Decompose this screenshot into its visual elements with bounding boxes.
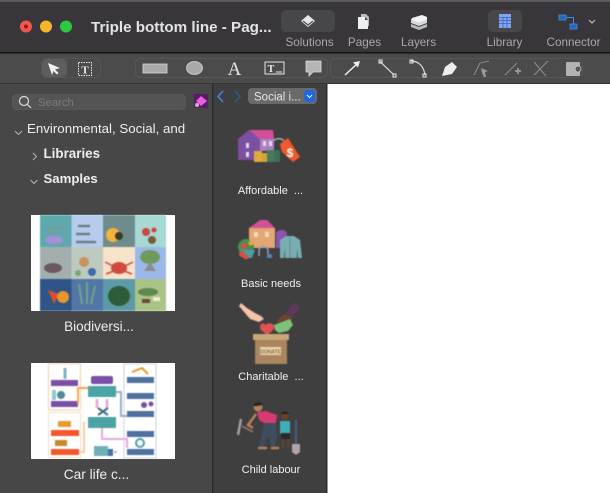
library item: Child labour: [238, 402, 301, 476]
line and pen tools group: [330, 58, 582, 78]
shape tools group: [136, 58, 328, 80]
toolbar button: Layers: [401, 15, 436, 49]
window traffic lights: [20, 20, 72, 32]
toolbar button: Connector: Connector: [547, 36, 601, 49]
middle panel: social impact library: [214, 84, 328, 493]
library item: Charitable organization: Charitable ...: [238, 371, 304, 383]
left panel: library tree: [0, 84, 214, 493]
library item: Affordable housing: Affordable ...: [238, 185, 303, 197]
toolbar button: Layers: Layers: [401, 36, 436, 49]
drawing canvas: [328, 84, 610, 493]
library navigation: [218, 88, 317, 104]
library item: Affordable housing: $: [287, 146, 294, 160]
toolbar button: Pages: Pages: [348, 36, 381, 49]
library item: Charitable organization: DONATE: [260, 350, 281, 356]
drawing toolbar: [0, 54, 610, 84]
tree item: Libraries: Libraries: [44, 146, 100, 161]
sample thumbnail: car life cycle: [31, 363, 175, 482]
toolbar button: Connector: [547, 15, 601, 49]
library navigation: Social i...: [254, 92, 301, 104]
sample thumbnail: biodiversity: [31, 215, 175, 334]
toolbar button: Solutions: [281, 10, 335, 49]
toolbar button: Solutions: Solutions: [285, 36, 334, 49]
tree item: Environmental: Environmental, Social, and: [27, 121, 185, 136]
library item: Basic needs: Basic needs: [241, 278, 301, 290]
library item: Child labour: Child labour: [242, 464, 301, 476]
shape tools group: A: [228, 59, 242, 80]
selection tool group: [42, 58, 100, 78]
window title: Triple bottom line - Pag...: [91, 19, 272, 36]
toolbar button: Library: Library: [487, 36, 523, 49]
library item: Charitable organization: [238, 302, 304, 383]
tree item: Samples: Samples: [44, 171, 98, 186]
shape tools group: T: [268, 64, 275, 75]
toolbar button: Pages: [348, 14, 381, 49]
search box: [12, 94, 186, 110]
library item: Basic needs: [238, 220, 302, 290]
toolbar button: Library: [487, 10, 523, 49]
title bar: [0, 0, 610, 54]
sample thumbnail: biodiversity: Biodiversi...: [64, 319, 134, 334]
sample thumbnail: car life cycle: Car life c...: [64, 467, 129, 482]
selection tool group: T: [81, 64, 89, 76]
library item: Affordable housing: [238, 130, 303, 197]
icon: magic search: [194, 94, 208, 108]
search box: Search: [38, 97, 74, 109]
